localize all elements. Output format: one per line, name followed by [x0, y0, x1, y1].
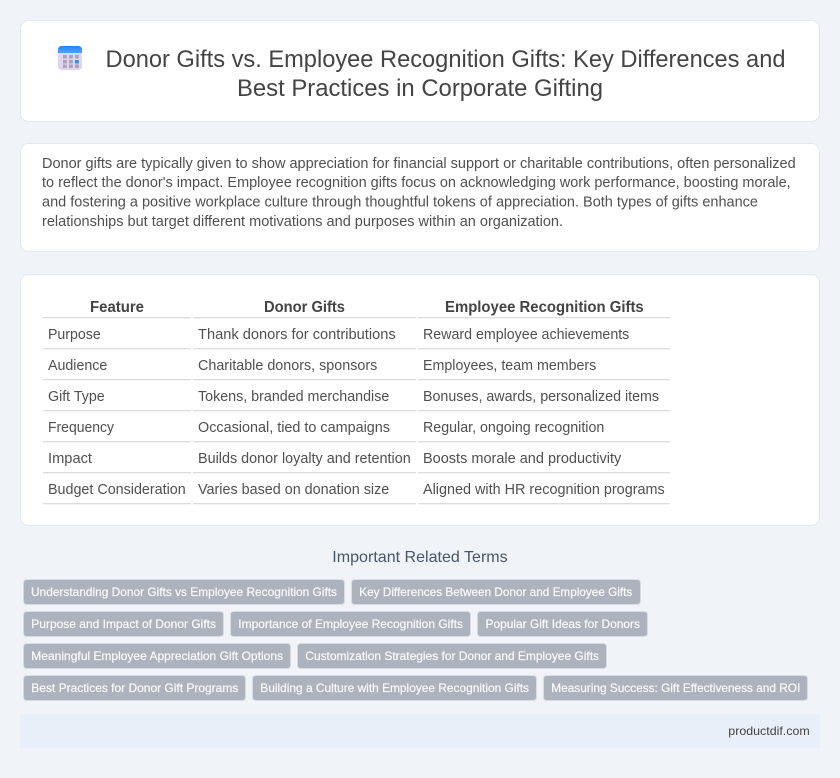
row: frequency: Occasional, tied to campaigns	[198, 420, 390, 436]
intro paragraph: relationships but target different motivations and purposes within an organization.	[42, 214, 563, 230]
tag: Best Practices for Donor Gift Programs	[31, 681, 238, 695]
row: frequency	[48, 420, 604, 436]
row: impact	[48, 451, 622, 467]
panel: intro text	[20, 144, 820, 252]
tag	[24, 580, 344, 604]
tag	[24, 644, 290, 668]
tag	[298, 644, 606, 668]
row: audience: Charitable donors, sponsors	[198, 358, 377, 374]
row: budget consideration: Aligned with HR recognition programs	[423, 482, 665, 498]
row: impact: Impact	[48, 451, 92, 467]
row: purpose: Reward employee achievements	[423, 327, 629, 343]
row: audience	[48, 358, 596, 374]
panel: header	[20, 20, 820, 122]
intro paragraph: Donor gifts are typically given to show appreciation for financial support or charitable contributions, often personalized	[42, 156, 796, 172]
tag	[544, 676, 808, 700]
table header row: Employee Recognition Gifts	[445, 299, 644, 316]
row: gift type: Bonuses, awards, personalized items	[423, 389, 659, 405]
table header row	[90, 299, 644, 316]
tag: Importance of Employee Recognition Gifts	[238, 617, 463, 631]
footer	[20, 714, 820, 748]
tag: Popular Gift Ideas for Donors	[486, 617, 640, 631]
title: Donor Gifts vs. Employee Recognition Gifts: Key Differences and	[106, 46, 786, 73]
tag: Purpose and Impact of Donor Gifts	[31, 617, 216, 631]
panel: comparison table	[20, 274, 820, 526]
tag	[24, 676, 246, 700]
tag: Customization Strategies for Donor and Employee Gifts	[305, 649, 599, 663]
row: impact: Boosts morale and productivity	[423, 451, 622, 467]
icon: calendar	[58, 46, 82, 70]
tag: Building a Culture with Employee Recognition Gifts	[260, 681, 529, 695]
intro paragraph: to reflect the donor's impact. Employee recognition gifts focus on acknowledging work performance, boosting morale,	[42, 175, 791, 191]
row: purpose	[48, 327, 629, 343]
tag	[478, 612, 648, 636]
row: frequency: Frequency	[48, 420, 115, 436]
row: impact: Builds donor loyalty and retention	[198, 451, 411, 467]
related term tags	[24, 580, 808, 700]
intro paragraph	[42, 156, 796, 230]
row: gift type: Tokens, branded merchandise	[198, 389, 389, 405]
row: budget consideration: Varies based on donation size	[198, 482, 389, 498]
row: audience: Employees, team members	[423, 358, 596, 374]
table header row: Feature	[90, 299, 144, 316]
footer: productdif.com	[728, 724, 810, 738]
tag	[24, 612, 224, 636]
row: gift type: Gift Type	[48, 389, 105, 405]
title: Best Practices in Corporate Gifting	[237, 75, 603, 102]
tag: Measuring Success: Gift Effectiveness and ROI	[551, 681, 800, 695]
row: frequency: Regular, ongoing recognition	[423, 420, 604, 436]
row: purpose: Purpose	[48, 327, 101, 343]
title	[106, 46, 786, 102]
row: budget consideration	[48, 482, 665, 498]
tag	[230, 612, 470, 636]
intro paragraph: and fostering a positive workplace culture through thoughtful tokens of appreciation. Both types of gifts enhance	[42, 194, 758, 210]
row: audience: Audience	[48, 358, 107, 374]
tag: Understanding Donor Gifts vs Employee Recognition Gifts	[31, 585, 337, 599]
tag	[252, 676, 536, 700]
heading: related terms: Important Related Terms	[332, 549, 508, 566]
tag: Meaningful Employee Appreciation Gift Options	[31, 649, 283, 663]
tag	[352, 580, 640, 604]
tag: Key Differences Between Donor and Employee Gifts	[359, 585, 632, 599]
table header row: Donor Gifts	[264, 299, 345, 316]
row: budget consideration: Budget Consideration	[48, 482, 186, 498]
row: purpose: Thank donors for contributions	[198, 327, 396, 343]
row: gift type	[48, 389, 659, 405]
